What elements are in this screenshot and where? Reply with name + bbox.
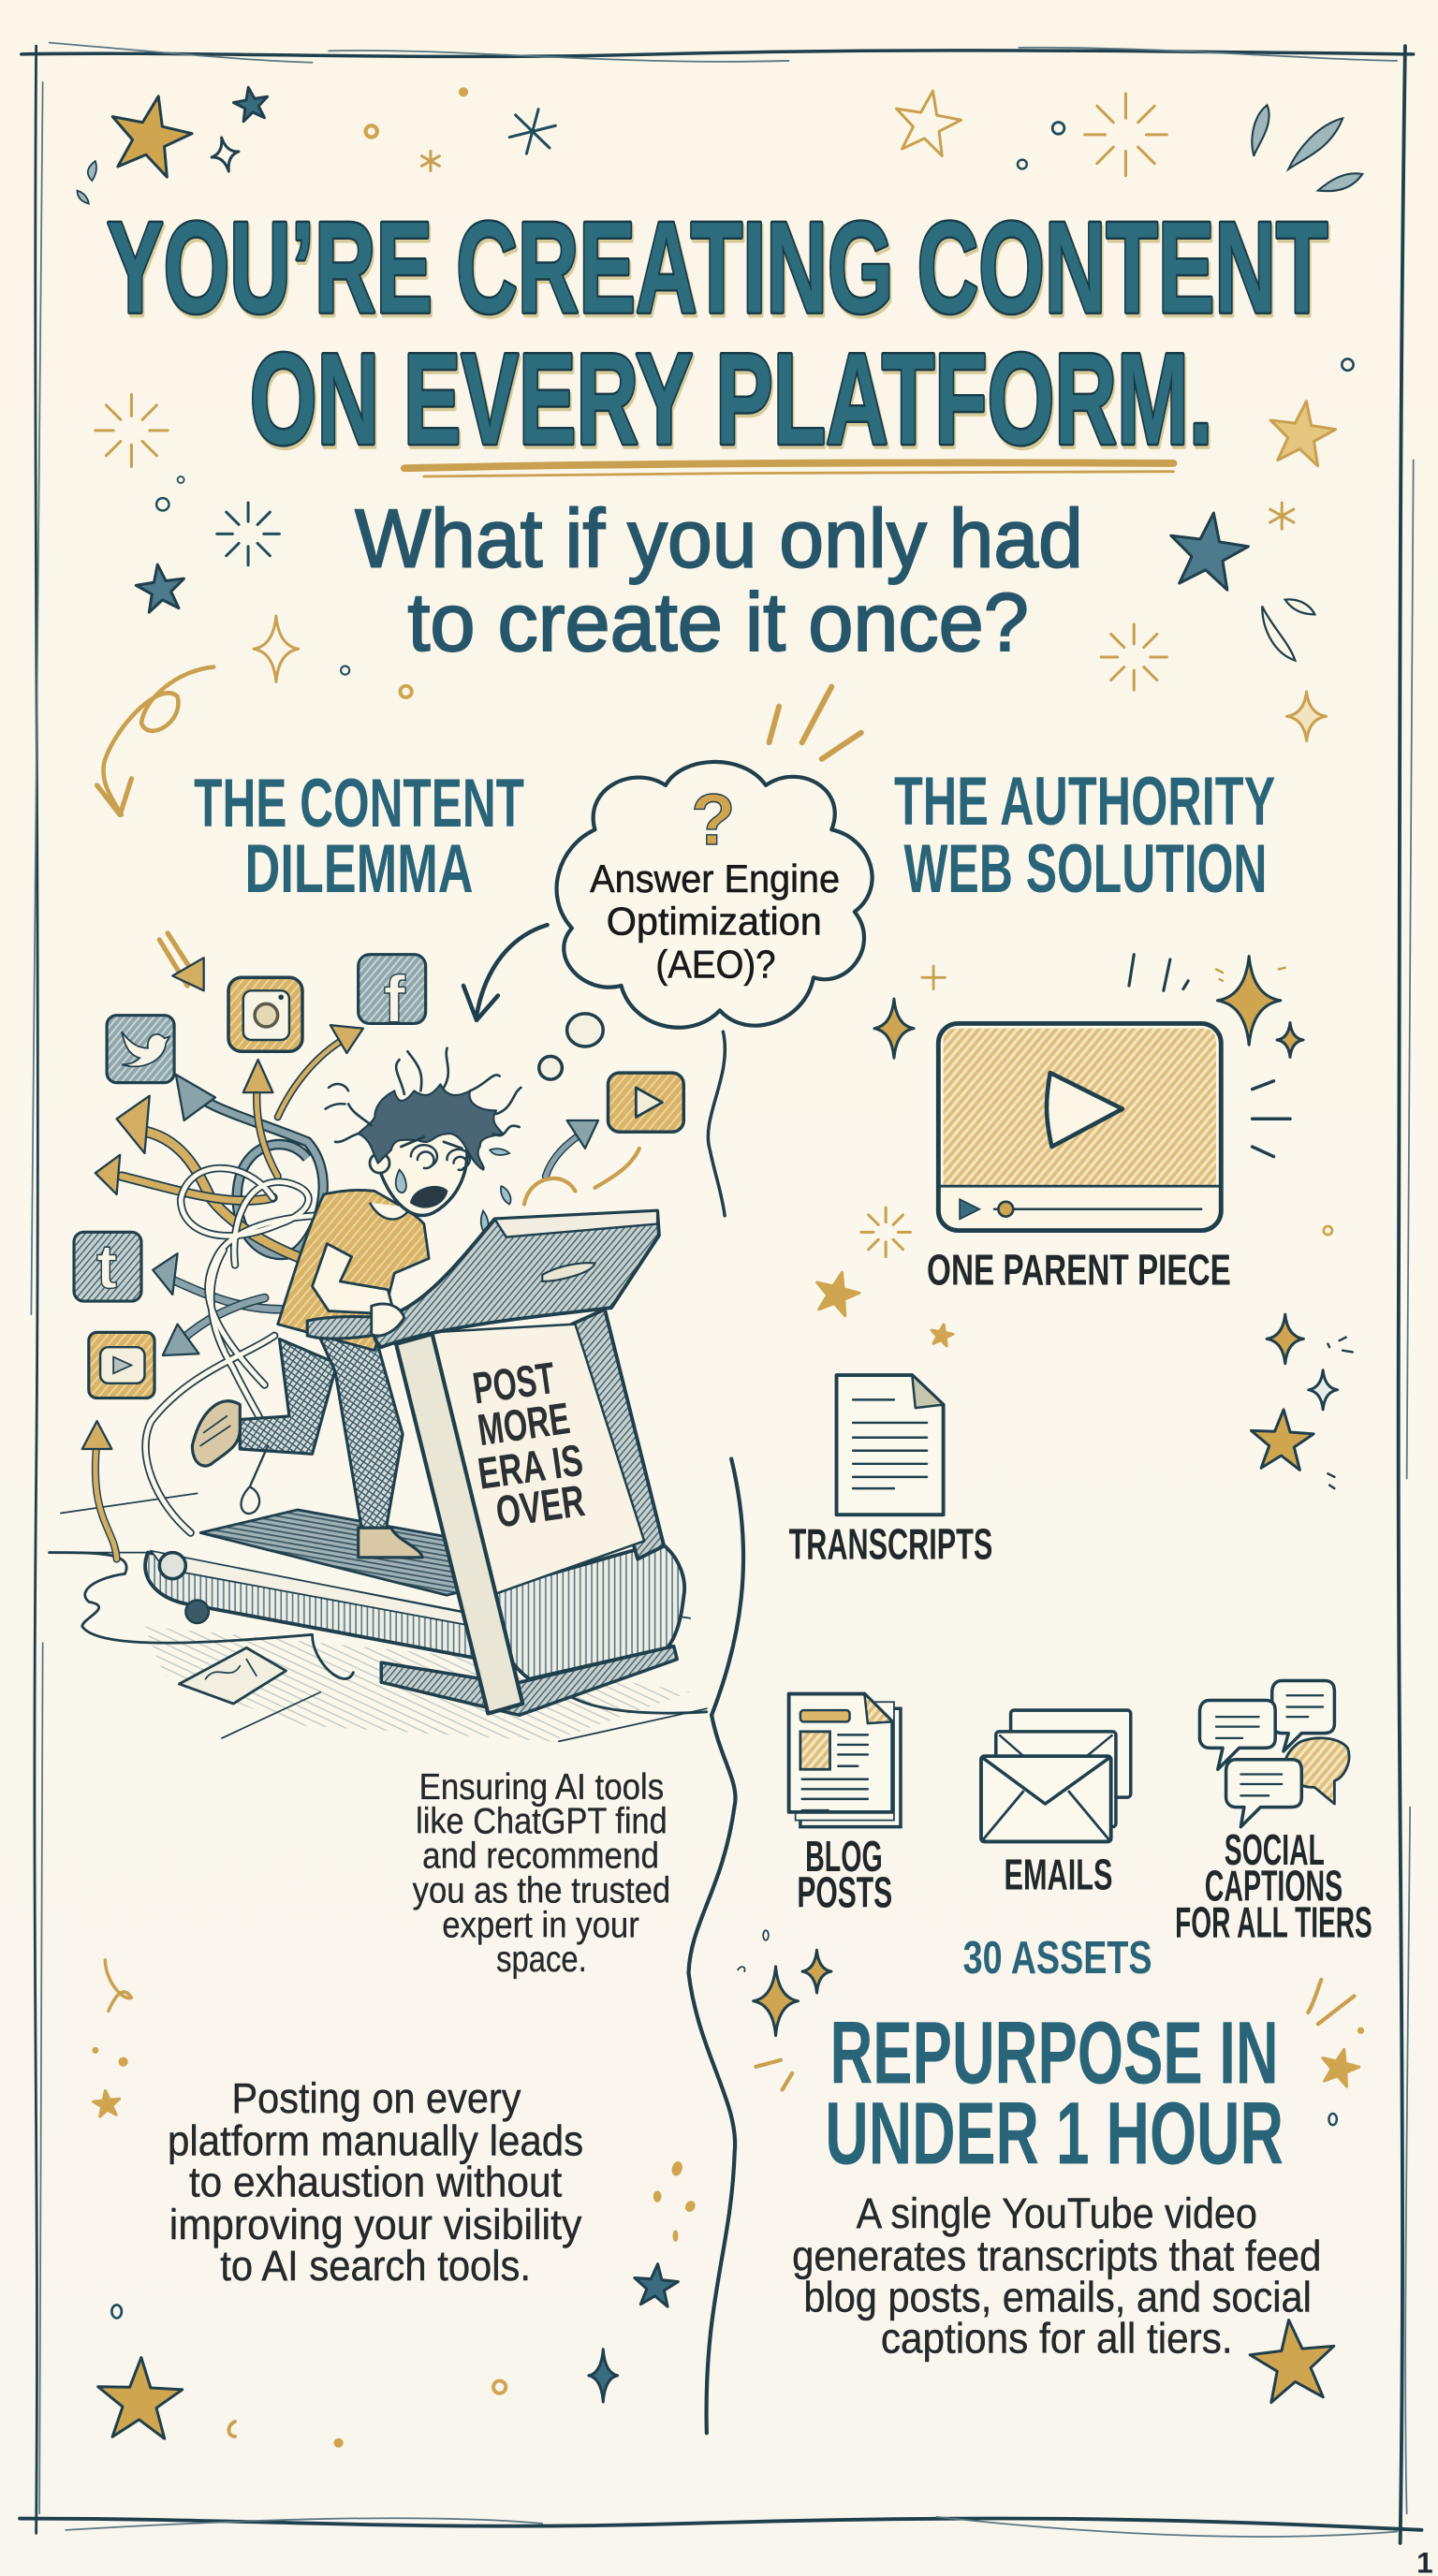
tangled cables: [145, 1168, 348, 1533]
label: transcripts: TRANSCRIPTS: [789, 1520, 992, 1569]
sign text: POST: [470, 1354, 558, 1414]
slate loop behind the tangle: [176, 1075, 323, 1254]
thought cloud: AEO: Optimization: [607, 900, 822, 944]
heading: repurpose in under 1 hour: [825, 2003, 1284, 2183]
sign text: MORE: [475, 1394, 573, 1456]
text: AEO explanation: you as the trusted: [413, 1870, 670, 1910]
sign text: [470, 1354, 588, 1538]
decoration: middle doodles: [95, 359, 1354, 815]
text: AEO explanation: like ChatGPT find: [416, 1802, 668, 1842]
label: 30 assets: 30 ASSETS: [963, 1933, 1152, 1983]
label: one parent piece: ONE PARENT PIECE: [927, 1245, 1231, 1294]
icon: video player: [938, 1023, 1221, 1231]
decoration: bottom doodles: [92, 1930, 1363, 2447]
text: repurpose description: blog posts, emails, and social: [803, 2273, 1312, 2320]
icon: transcript document: [837, 1375, 944, 1515]
floor hatching and cables: [50, 1493, 707, 1741]
treadmill deck: [145, 1510, 684, 1715]
icon: youtube left: [89, 1332, 154, 1398]
text: repurpose description: A single YouTube video: [857, 2189, 1257, 2237]
thought cloud: AEO: (AEO)?: [655, 942, 776, 986]
text: dilemma description: Posting on every: [232, 2074, 521, 2122]
text: dilemma description: improving your visibility: [169, 2201, 582, 2248]
divider: upper: [708, 1032, 725, 1216]
label: social captions: SOCIAL: [1225, 1825, 1325, 1874]
title underline: [404, 462, 1173, 476]
icon: twitter: [107, 1016, 174, 1083]
text: AEO explanation: expert in your: [442, 1905, 639, 1945]
book on floor: [179, 1647, 286, 1704]
icon: social speech bubbles: [1199, 1680, 1349, 1827]
heading: the content dilemma: THE CONTENT: [194, 764, 524, 842]
icon: facebook: f: [384, 962, 406, 1036]
thought bubbles: [539, 1014, 603, 1079]
label: blog posts: POSTS: [797, 1868, 892, 1917]
runner head: [326, 1048, 521, 1236]
text: AEO explanation: and recommend: [422, 1837, 659, 1877]
subheading: [355, 493, 1083, 668]
sign text: OVER: [493, 1476, 588, 1538]
illustration: overwhelmed runner on treadmill: [50, 925, 707, 1741]
text: dilemma description: platform manually leads: [168, 2117, 583, 2165]
label: emails: EMAILS: [1005, 1850, 1112, 1898]
icon: blog posts: [789, 1694, 901, 1827]
icon: facebook: [359, 955, 426, 1036]
heading: the content dilemma: DILEMMA: [245, 829, 474, 907]
treadmill console: [372, 1211, 659, 1347]
thought cloud: AEO: [557, 762, 873, 1028]
text: AEO explanation: Ensuring AI tools: [419, 1767, 664, 1808]
loose arrows: [82, 925, 639, 1559]
label: blog posts: [797, 1832, 892, 1917]
icon: tumblr: [74, 1232, 141, 1302]
divider: lower: [689, 1459, 743, 2433]
title: [107, 195, 1328, 472]
heading: the authority web solution: THE AUTHORITY: [894, 762, 1275, 840]
text: AEO explanation: space.: [496, 1939, 587, 1980]
text: repurpose description: [792, 2189, 1321, 2362]
decoration: top doodles: [78, 84, 1362, 204]
label: blog posts: BLOG: [805, 1832, 883, 1881]
subheading: What if you only had: [355, 493, 1083, 585]
subheading: to create it once?: [407, 577, 1029, 668]
text: dilemma description: to exhaustion without: [189, 2159, 563, 2206]
heading: the authority web solution: [894, 762, 1275, 907]
label: social captions: [1175, 1825, 1372, 1946]
icon: instagram: [228, 977, 302, 1051]
text: dilemma description: to AI search tools.: [220, 2242, 531, 2290]
decoration: video sparkles: [811, 955, 1353, 1488]
text: repurpose description: generates transcripts that feed: [792, 2232, 1321, 2280]
text: AEO explanation: [413, 1767, 670, 1980]
rear leg and shoe: [192, 1339, 337, 1514]
icon: emails: [981, 1710, 1131, 1841]
heading: the authority web solution: WEB SOLUTION: [903, 829, 1267, 907]
runner body: [278, 1190, 429, 1558]
heading: the content dilemma: [194, 764, 524, 907]
sign text: ERA IS: [475, 1436, 586, 1500]
thought cloud: AEO: Answer Engine: [590, 856, 840, 900]
icon: youtube right: [609, 1073, 683, 1132]
treadmill upright and sign panel: [396, 1310, 664, 1714]
text: repurpose description: captions for all tiers.: [881, 2314, 1233, 2362]
thought cloud: AEO: ?: [691, 780, 735, 860]
icon: tumblr: t: [96, 1233, 117, 1302]
text: dilemma description: [168, 2074, 583, 2290]
label: social captions: CAPTIONS: [1205, 1862, 1343, 1910]
